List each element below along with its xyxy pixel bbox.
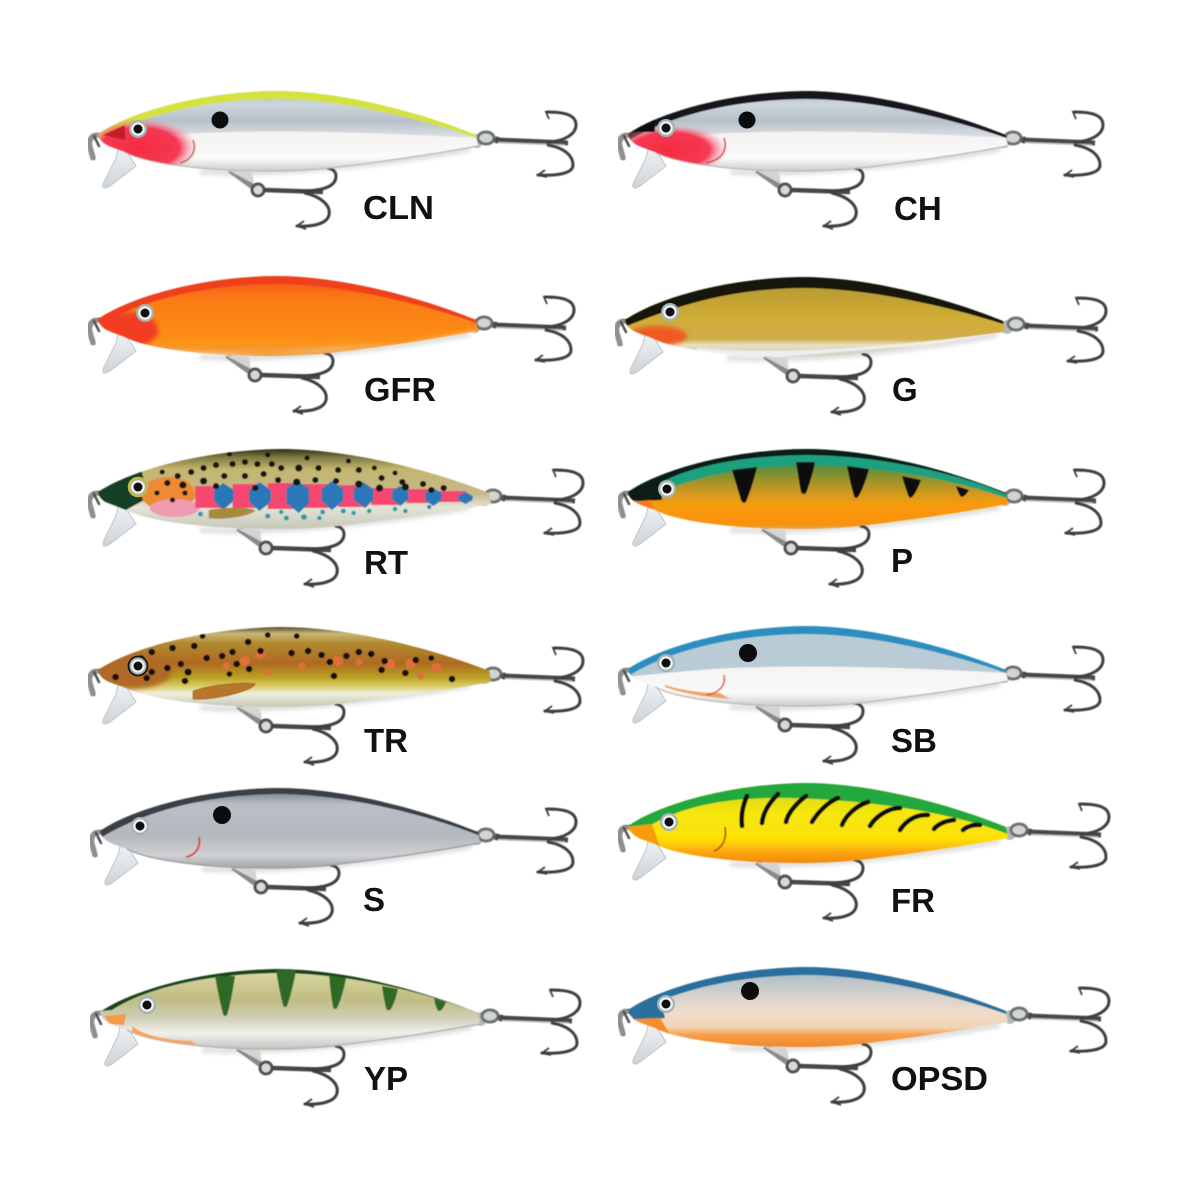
lure CH (612, 88, 1103, 229)
CH spot (738, 112, 756, 128)
P eye (658, 480, 676, 498)
panel: lure CLN (82, 88, 576, 229)
label S: S (363, 881, 385, 918)
G body (624, 276, 1006, 358)
panel: lure P (619, 446, 1104, 587)
label RT: RT (364, 544, 408, 581)
S body (92, 785, 482, 868)
label OPSD: OPSD (891, 1060, 988, 1097)
panel: lure GFR (89, 273, 574, 414)
OPSD eye (657, 995, 675, 1013)
lure P (619, 446, 1104, 587)
SB spot (739, 644, 757, 662)
lure SB (619, 623, 1103, 764)
panel: lure OPSD (619, 964, 1109, 1105)
panel: lure G (616, 274, 1106, 415)
lure OPSD (619, 964, 1109, 1105)
S spot (213, 806, 231, 824)
panel: lure FR (619, 780, 1109, 921)
RT eye (129, 478, 147, 496)
YP bars (215, 970, 446, 1016)
lure G (616, 274, 1106, 415)
label TR: TR (364, 722, 408, 759)
CLN eye (129, 120, 147, 138)
lure FR (619, 780, 1109, 921)
lure GFR (89, 273, 574, 414)
SB eye (657, 654, 675, 672)
G eye (661, 303, 679, 321)
panel: lure CH (612, 88, 1103, 229)
panel: lure S (91, 785, 576, 926)
CLN spot (212, 112, 228, 128)
P bars (732, 462, 969, 503)
label CLN: CLN (363, 189, 434, 226)
label GFR: GFR (364, 371, 436, 408)
lure CLN (82, 88, 576, 229)
label P: P (891, 542, 913, 579)
lure YP (91, 966, 580, 1107)
label G: G (892, 371, 918, 408)
label YP: YP (364, 1060, 408, 1097)
RT body (95, 449, 491, 529)
CLN body (98, 90, 478, 172)
label SB: SB (891, 722, 937, 759)
P body (620, 446, 1010, 529)
panel: lure YP (91, 966, 580, 1107)
FR body (620, 780, 1010, 863)
YP body (92, 966, 482, 1049)
GFR eye (136, 304, 154, 322)
GFR body (97, 275, 479, 357)
panel: lure SB (619, 623, 1103, 764)
TR eye (129, 657, 147, 675)
lure TR (89, 627, 583, 765)
S eye (131, 817, 149, 835)
FR stripes (742, 794, 980, 830)
CH eye (657, 119, 675, 137)
YP eye (138, 996, 156, 1014)
panel: lure RT (89, 449, 583, 587)
OPSD body (620, 964, 1010, 1047)
panel: lure TR (89, 627, 583, 765)
lure S (91, 785, 576, 926)
lure RT (89, 449, 583, 587)
label FR: FR (891, 882, 935, 919)
FR eye (660, 813, 678, 831)
label CH: CH (894, 190, 942, 227)
SB body (620, 623, 1010, 706)
TR body (90, 627, 491, 707)
OPSD spot (741, 982, 759, 1000)
CH body (628, 90, 1008, 172)
